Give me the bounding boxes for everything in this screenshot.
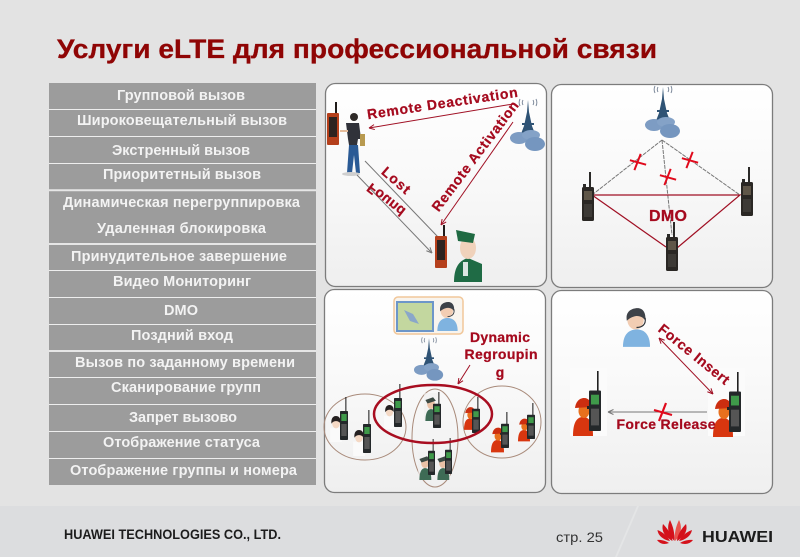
label: dynamic regrouping: Regroupin [464,346,538,362]
arrow: found [357,175,432,253]
icon: radio left [582,172,594,221]
label: force insert: Force Insert [655,321,733,388]
icon: cross left [630,154,646,170]
row: scheduled call: Вызов по заданному времени [75,355,295,371]
page number: стр. 25 [556,529,603,545]
label: dynamic regrouping: g [496,364,504,380]
icon: cross middle [660,169,676,185]
label: found: Found [364,180,408,220]
row: dynamic regrouping: Динамическая перегруппировка [63,195,301,211]
label: remote deactivation: Remote Deactivation [366,84,519,122]
row: group scanning: Сканирование групп [111,380,261,396]
label: remote activation: Remote Activation [428,98,522,214]
group: firemen [463,386,541,458]
feature list table [49,83,316,485]
icon: man with radio [340,113,365,176]
group: officers [412,389,458,487]
row: forced termination: Принудительное завершение [71,249,287,265]
panel: DMO [552,84,772,288]
row: group call: Групповой вызов [117,88,245,104]
icon: tower [510,99,545,151]
arrow: remote activation [441,122,513,225]
icon: dispatcher [623,308,650,347]
users firemen [464,397,535,452]
icon: radio right [741,167,753,216]
arrow: remote deactivation [369,104,513,128]
row: broadcast call: Широковещательный вызов [77,113,287,129]
row: priority call: Приоритетный вызов [103,167,261,183]
HUAWEI logo: HUAWEI [702,529,773,546]
row: emergency call: Экстренный вызов [112,143,250,159]
label: lost: Lost [379,163,414,197]
row: remote blocking: Удаленная блокировка [97,221,267,237]
icon: cross [654,403,672,421]
arrow: regroup [458,365,470,384]
title: Услуги eLTE для профессиональной связи [57,34,657,64]
users left group [330,384,402,456]
row: late entry: Поздний вход [131,328,233,344]
label: DMO: DMO [649,208,687,225]
icon: officer [454,230,482,282]
user right with radio [708,368,745,437]
row: status display: Отображение статуса [103,435,261,451]
icon: cross right [682,152,698,168]
icon: radio bottom [435,225,447,268]
icon: radio top left [327,102,339,145]
users officers [418,392,452,480]
panel: dynamic regrouping [324,290,546,492]
label: force release: Force Release [616,416,716,432]
row: call barring: Запрет вызово [129,410,237,426]
HUAWEI logo [657,520,773,546]
highlight ellipse [374,385,492,443]
row: group and number display: Отображение группы и номера [70,463,298,479]
arrow: force insert [659,338,713,394]
DMO red links [592,195,740,248]
row: video monitoring: Видео Мониторинг [113,274,251,290]
icon: tower [645,86,680,138]
dispatcher console [394,297,463,334]
user left with radio [570,368,607,436]
icon: radio bottom [666,222,678,271]
arrow: force release [608,411,707,413]
company name: HUAWEI TECHNOLOGIES CO., LTD. [64,527,281,542]
row: DMO: DMO [164,303,198,319]
panel: remote activation [326,84,546,286]
dashed links to tower [592,140,740,235]
footer band [0,506,800,557]
group: white left [324,394,406,460]
panel: force insert and release [552,290,772,494]
icon: tower [414,337,443,381]
label: dynamic regrouping: Dynamic [470,329,530,345]
arrow: lost [365,161,438,237]
